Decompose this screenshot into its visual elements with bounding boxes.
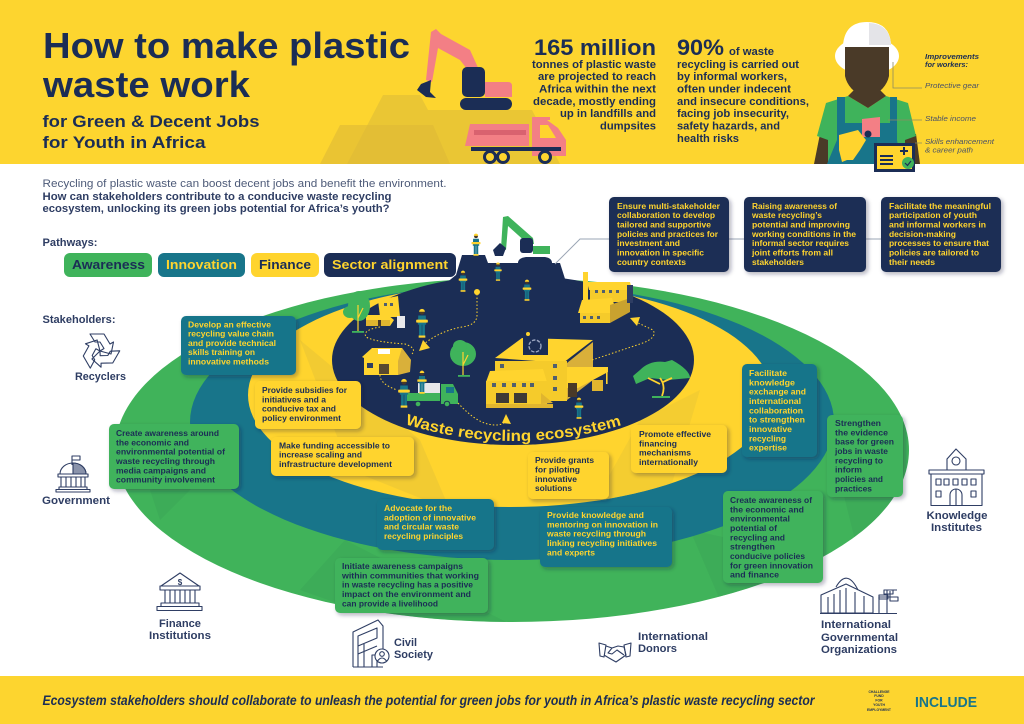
pathway: sector alignment [324,253,456,277]
card: community campaigns: Initiate awareness campaigns [342,562,464,571]
card: evidence base: base for green [835,438,894,447]
stakeholder: civil society: Civil [394,637,417,649]
card: circular principles: recycling principles [384,532,464,541]
stakeholder: recyclers [75,334,126,383]
card: subsidies [255,381,361,429]
statistic: 90%: safety hazards, and [677,120,780,132]
card: evidence base: policies and [835,475,883,484]
pathway: finance [251,253,319,277]
top card: raising awareness: informal sector requires [752,239,850,248]
card: knowledge exchange: international [749,397,801,406]
icon: certificate [874,143,915,172]
top card: meaningful participation: their needs [889,258,936,267]
card: subsidies: conducive tax and [262,405,336,414]
top card: multi-stakeholder collaboration: collaboration to develop [617,211,715,220]
improvements for workers callouts: Skills enhancement [925,137,995,146]
card: policy awareness: Create awareness of [730,496,812,505]
statistic: 90%: by informal workers, [677,71,787,83]
card: knowledge exchange: exchange and [749,388,806,397]
logo: include: INCLUDE [915,694,977,711]
icon: tree left [343,291,370,333]
statistic: 165 million: 165 million [534,35,656,60]
card: financing mechanisms [631,425,727,473]
icon: green truck [407,383,458,407]
top card: multi-stakeholder collaboration: investment and [617,239,680,248]
card: financing mechanisms: Promote effective [639,430,712,439]
statistic: 165 million: are projected to reach [538,71,656,83]
title: How to make plastic [43,25,410,66]
title: waste work [42,64,251,105]
improvements for workers callouts: for workers: [925,60,969,69]
icon: tree right [633,360,690,398]
pathway: awareness: Awareness [72,258,145,272]
improvements for workers callouts: Stable income [925,114,976,123]
logo: challenge fund: EMPLOYMENT [867,708,892,712]
stakeholder: knowledge institutes: Knowledge [926,510,988,522]
intro text: How can stakeholders contribute to a conducive waste recycling [42,191,391,203]
card: evidence base: practices [835,484,873,493]
card: policy awareness: potential of [730,524,777,533]
statistic: 165 million: up in landfills and [560,108,656,120]
card: policy awareness: and finance [730,571,780,580]
card: mentoring: linking recycling initiatives [547,539,658,548]
stakeholders heading: Stakeholders: [42,314,116,326]
stakeholder: civil society [353,620,433,667]
improvements for workers callouts: Protective gear [925,81,980,90]
stakeholder: knowledge institutes: Institutes [931,522,982,534]
top card: raising awareness: working conditions in the [751,230,857,239]
card: policy awareness [723,491,823,583]
stakeholder: finance institutions [149,573,211,642]
top card: meaningful participation: policies are tailored to [889,248,979,258]
top card: multi-stakeholder collaboration: Ensure multi-stakeholder [617,202,720,211]
card: grants: Provide grants [535,456,595,465]
card: recycling value chain: and provide technical [188,339,276,348]
card: circular principles: adoption of innovative [384,513,477,522]
stakeholder: knowledge institutes [926,449,988,534]
logo: challenge fund [867,690,892,712]
card: subsidies: policy environment [262,414,341,423]
statistic: 90%: recycling is carried out [677,59,799,71]
card: media awareness [109,424,239,489]
subtitle [42,112,260,152]
stakeholder: recyclers: Recyclers [75,371,126,383]
stakeholder: civil society: Society [394,649,433,661]
card: knowledge exchange: collaboration [749,406,803,415]
card: community campaigns: can provide a livelihood [342,599,438,608]
card: grants: for piloting [535,466,580,474]
building: sorting shed [362,348,411,375]
card: media awareness: the economic and [116,438,189,447]
card: evidence base [827,415,903,497]
logo: challenge fund: FUND [874,694,884,698]
stakeholder: finance institutions: Institutions [149,630,211,642]
top card: multi-stakeholder collaboration [609,197,729,272]
card: policy awareness: conducive policies [730,552,806,561]
card: grants [528,452,609,499]
card: mentoring: Provide knowledge and [547,511,644,520]
card: media awareness: environmental potential of [116,448,225,457]
statistic: 165 million: dumpsites [600,120,656,132]
card: subsidies: Provide subsidies for [262,386,347,395]
pathway: finance: Finance [259,258,311,272]
top card: raising awareness: Raising awareness of [752,202,837,211]
top card: multi-stakeholder collaboration: tailored and supportive [617,220,712,230]
building: main recycling plant [486,332,608,408]
process flow arrows [365,289,654,425]
card: knowledge exchange: Facilitate [749,369,788,378]
stakeholder: international governmental organizations [820,578,898,656]
card: financing mechanisms: mechanisms [639,449,692,458]
card: recycling value chain: Develop an effective [188,320,272,329]
footer band [0,676,1024,724]
card: funding access [271,437,414,476]
intro text: Recycling of plastic waste can boost decent jobs and benefit the environment. [42,178,446,190]
statistic: 165 million: Africa within the next [539,84,656,96]
card: policy awareness: environmental [730,515,790,524]
card: media awareness: community involvement [116,476,215,485]
title [42,25,410,105]
card: media awareness: waste recycling through [115,457,215,466]
card: mentoring [540,507,672,567]
card: circular principles: Advocate for the [384,504,453,513]
card: media awareness: media campaigns and [116,466,206,475]
header hills [320,95,560,164]
pathway: awareness [64,253,152,277]
building: small depot top left [366,296,405,328]
stakeholder: government: Government [42,495,111,507]
top card: raising awareness: potential and improving [752,220,850,230]
card: subsidies: initiatives and a [262,395,327,404]
card: policy awareness: recycling and [730,533,785,542]
card: community campaigns [335,558,488,613]
logo: challenge fund: CHALLENGE [868,690,890,694]
pathways heading: Pathways: [42,237,98,249]
card: community campaigns: in waste recycling has a positive [342,581,474,590]
top card: multi-stakeholder collaboration: innovation in specific [617,248,705,258]
card: evidence base: inform [835,466,862,475]
card: evidence base: the evidence [835,428,889,437]
statistic: 90%: and insecure conditions, [677,96,809,108]
card: knowledge exchange: to strengthen [749,416,805,425]
statistic: 90%: of waste [729,46,774,58]
subtitle: for Green & Decent Jobs [42,112,260,131]
stakeholder: government [42,456,111,507]
stakeholder: finance institutions: Finance [159,618,201,630]
icon: tree centre [450,340,476,377]
intro text: ecosystem, unlocking its green jobs potential for Africa’s youth? [42,203,390,215]
card: policy awareness: strengthen [730,543,775,552]
top card: multi-stakeholder collaboration: policies and practices for [617,230,718,239]
stakeholder: international donors [599,631,708,662]
card: mentoring: and experts [547,548,596,557]
ecosystem label: Waste recycling ecosystem [408,414,621,444]
statistic: 165 million: decade, mostly ending [533,96,656,108]
pathway: sector alignment: Sector alignment [332,258,449,272]
card: knowledge exchange [742,364,817,457]
top card: meaningful participation: and informal workers in [889,220,986,230]
workers [398,234,583,419]
card: knowledge exchange: expertise [749,444,788,453]
card: financing mechanisms: financing [639,439,677,448]
logo: challenge fund: YOUTH [873,703,885,707]
statistic: 165 million: tonnes of plastic waste [532,59,656,71]
card: financing mechanisms: internationally [639,458,699,467]
card: media awareness: Create awareness around [116,429,219,438]
card: recycling value chain [181,316,296,375]
pathway: innovation: Innovation [166,258,237,272]
card: mentoring: mentoring on innovation in [547,520,658,529]
footer message: Ecosystem stakeholders should collaborate to unleash the potential for green jobs for youth in Africa’s plastic waste recycling sector [42,693,815,708]
card: evidence base: recycling to [835,456,883,465]
stakeholder: international donors: Donors [638,643,677,655]
connector lines [555,239,881,264]
stakeholder: international governmental organizations: Organizations [821,644,897,656]
statistic: 90%: 90% [677,35,724,60]
card: recycling value chain: innovative methods [188,358,270,366]
card: evidence base: jobs in waste [834,447,889,456]
top card: meaningful participation: Facilitate the meaningful [889,202,991,211]
card: grants: solutions [535,484,573,493]
statistic: 90%: facing job insecurity, [677,108,789,120]
statistic: 165 million [532,35,656,132]
building: factory top right [578,272,633,323]
top card: meaningful participation: decision-making [889,230,956,239]
stakeholder ellipse rings [115,255,915,625]
improvements for workers callouts: Improvements [925,52,979,61]
intro text [42,178,446,215]
stakeholder: finance institutions: $ [178,578,183,587]
top card: meaningful participation: processes to ensure that [889,239,989,248]
icon: pink dump truck [465,117,566,162]
card: funding access: increase scaling and [279,451,362,460]
top card: raising awareness: waste recycling’s [751,211,823,220]
improvements for workers callouts [888,52,995,154]
stakeholder: international governmental organizations: Governmental [821,632,898,644]
stakeholder: international governmental organizations: International [821,619,891,631]
top card: multi-stakeholder collaboration: country contexts [617,258,687,267]
card: grants: innovative [535,475,578,484]
top card: raising awareness [744,197,866,272]
improvements for workers callouts: & career path [925,146,973,154]
illustration: waste worker [814,22,920,164]
icon: green excavator [493,216,550,256]
top card: meaningful participation [881,197,1001,272]
card: policy awareness: for green innovation [730,561,813,570]
card: mentoring: waste recycling through [546,530,646,539]
card: policy awareness: the economic and [730,505,804,514]
logo: challenge fund: FOR [875,698,883,702]
pathway: innovation [158,253,245,277]
card: circular principles: and circular waste [384,523,460,532]
top card: raising awareness: joint efforts from all [751,248,833,258]
card: evidence base: Strengthen [835,419,881,428]
card: knowledge exchange: innovative [749,425,793,434]
top card: raising awareness: stakeholders [752,258,805,267]
top card: meaningful participation: participation of youth [889,211,977,220]
card: knowledge exchange: recycling [749,434,786,443]
statistic: 90% [677,35,809,145]
card: community campaigns: impact on the environment and [342,590,471,599]
icon: pink excavator [417,29,512,110]
stakeholder: international donors: International [638,631,708,643]
header band [0,0,1024,164]
card: circular principles [377,499,494,550]
card: recycling value chain: recycling value chain [188,330,274,339]
card: funding access: infrastructure development [279,460,392,469]
card: funding access: Make funding accessible to [279,441,390,450]
subtitle: for Youth in Africa [42,133,206,152]
card: recycling value chain: skills training on [188,348,255,357]
card: community campaigns: within communities that working [341,571,479,580]
statistic: 90%: health risks [677,133,739,145]
statistic: 90%: often under indecent [677,84,791,96]
card: knowledge exchange: knowledge [749,378,796,387]
